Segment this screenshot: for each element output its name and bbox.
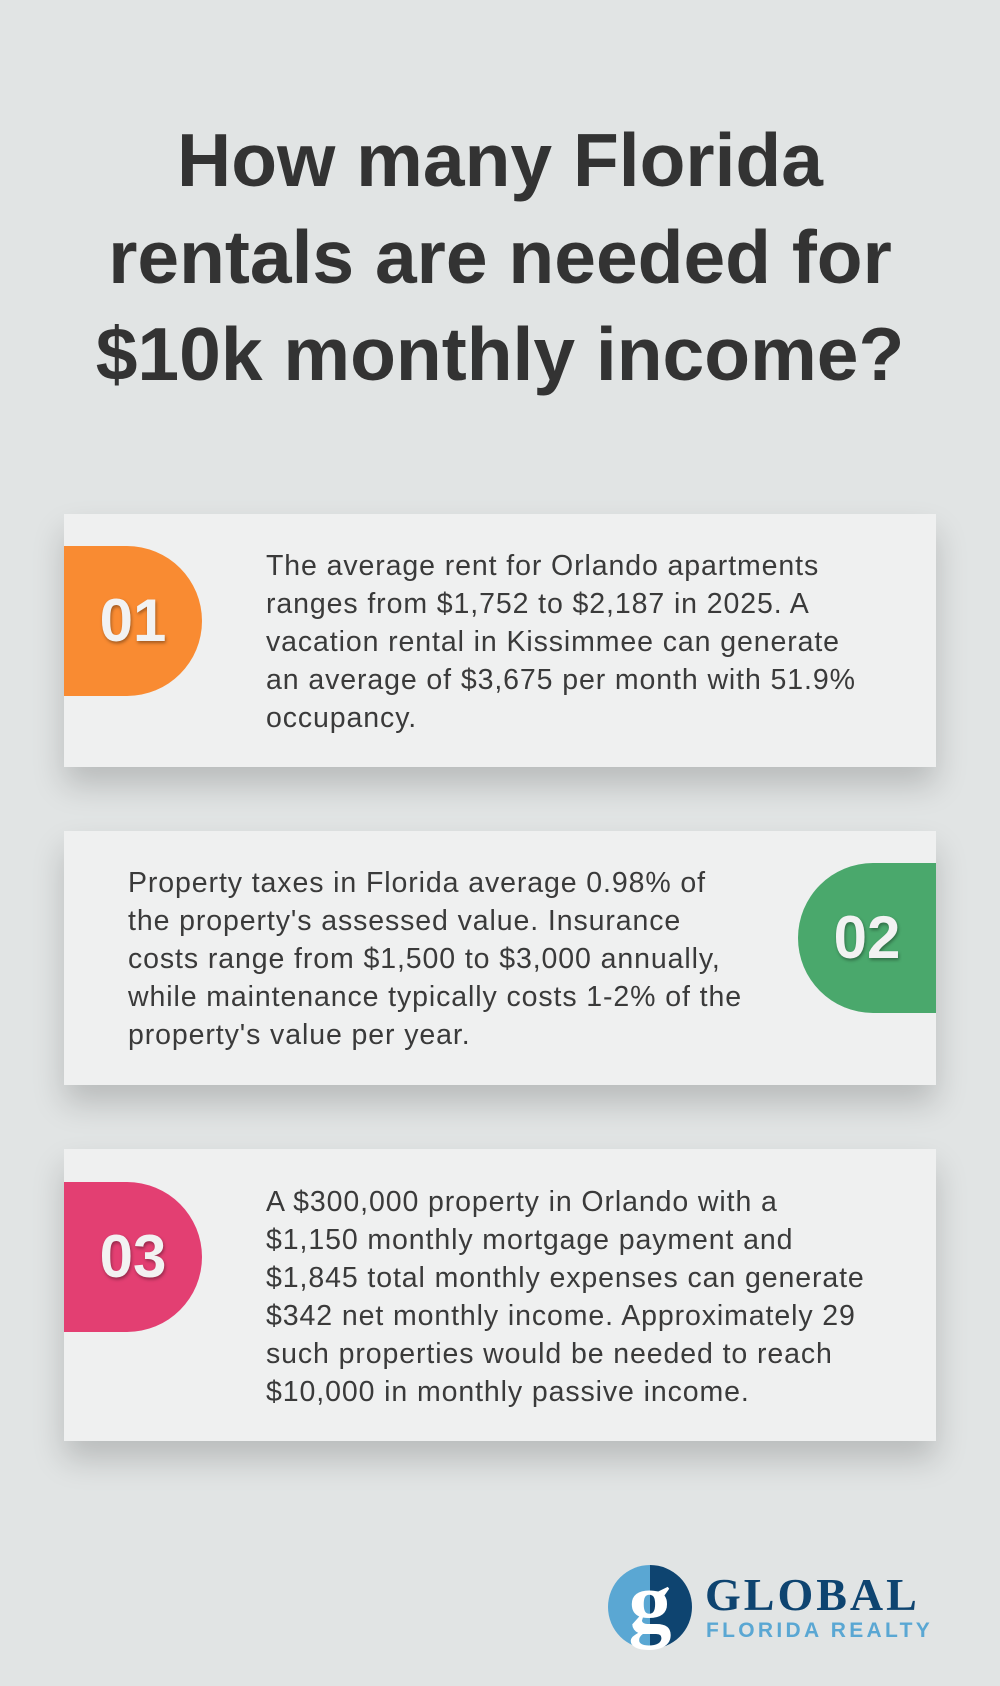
title: How many Florida [177,118,823,202]
text 01: ranges from $1,752 to $2,187 in 2025. A [266,588,810,620]
title [96,118,904,396]
title: rentals are needed for [108,215,892,299]
text 01: occupancy. [266,702,417,734]
badge 01 [64,546,202,696]
panel: card 03 [64,1149,936,1441]
title: $10k monthly income? [96,312,904,396]
text 02: costs range from $1,500 to $3,000 annually, [128,943,721,975]
text 02: Property taxes in Florida average 0.98% of [128,867,706,899]
text 01: The average rent for Orlando apartments [266,550,819,582]
text 03: $1,845 total monthly expenses can generate [266,1262,865,1294]
text 03: $1,150 monthly mortgage payment and [266,1224,793,1256]
text 03: A $300,000 property in Orlando with a [266,1186,778,1218]
logo text: GLOBAL [705,1569,920,1620]
text 03 [266,1186,865,1408]
text 02 [128,867,742,1051]
text 03: $342 net monthly income. Approximately 29 [266,1300,856,1332]
text 02: property's value per year. [128,1019,471,1051]
badge 03: 03 [100,1223,166,1290]
text 02: while maintenance typically costs 1-2% of the [128,981,742,1013]
text 02: the property's assessed value. Insurance [128,905,681,937]
text 03: $10,000 in monthly passive income. [266,1376,750,1408]
text 03: such properties would be needed to reach [266,1338,833,1370]
logo [608,1554,933,1650]
badge 03 [64,1182,202,1332]
badge 01: 01 [100,587,166,654]
text 01: an average of $3,675 per month with 51.9% [266,664,856,696]
text 01: vacation rental in Kissimmee can generate [266,626,840,658]
text 01 [266,550,856,734]
badge 02 [798,863,936,1013]
panel: card 02 [64,831,936,1085]
logo: FLORIDA REALTY [706,1619,933,1642]
icon: g circle: g [628,1554,672,1650]
badge 02: 02 [834,904,900,971]
panel: card 01 [64,514,936,767]
icon: g circle [608,1565,692,1649]
